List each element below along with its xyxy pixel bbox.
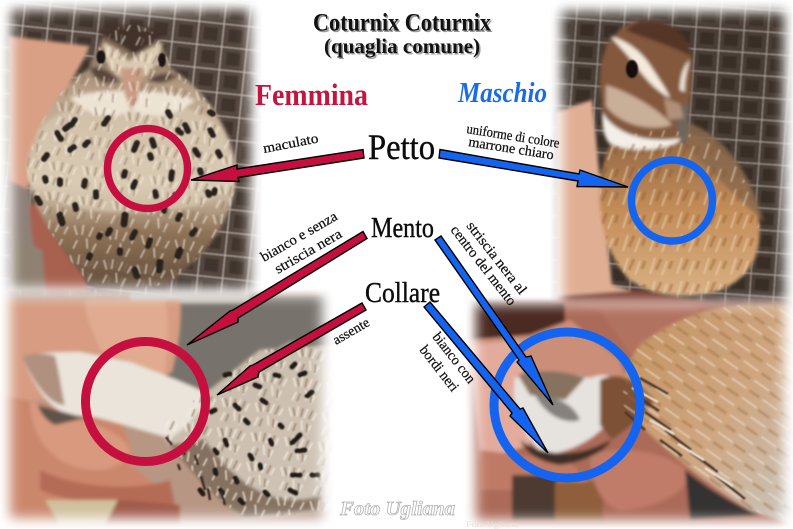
note: striscia nera al centro del mento: striscia nera al bbox=[463, 219, 530, 298]
heading: Maschio: Maschio bbox=[457, 77, 547, 109]
arrow: Collare to female collar bbox=[217, 303, 366, 395]
note: bianco con bordi neri: bordi neri bbox=[416, 343, 462, 395]
photo: female quail front bbox=[0, 0, 262, 300]
note: bianco e senza striscia nera: striscia nera bbox=[272, 226, 345, 277]
photo: male quail chin held in hand bbox=[465, 298, 793, 528]
note: bianco e senza striscia nera: bianco e senza bbox=[258, 208, 341, 265]
note: uniforme di colore marrone chiaro: marrone chiaro bbox=[467, 135, 555, 163]
arrow: Petto to male breast bbox=[439, 150, 628, 187]
watermark: small credit: Foto Ugliana bbox=[466, 520, 519, 529]
circle: female breast bbox=[108, 128, 188, 208]
note: uniforme di colore marrone chiaro bbox=[465, 122, 561, 163]
title: (quaglia comune) bbox=[324, 34, 480, 58]
circle: female chin bbox=[86, 342, 206, 462]
photo: female quail chin held in hand bbox=[0, 290, 335, 529]
note: assente: assente bbox=[330, 315, 373, 348]
note: uniforme di colore marrone chiaro: uniforme di colore bbox=[465, 122, 561, 152]
arrow: Mento to female chin bbox=[187, 232, 367, 345]
circle: male breast bbox=[632, 160, 712, 241]
title bbox=[313, 10, 493, 60]
title: Coturnix Coturnix bbox=[313, 10, 491, 36]
label: Collare: Collare bbox=[365, 277, 440, 309]
label: Mento: Mento bbox=[371, 212, 434, 244]
circle: male chin bbox=[494, 332, 640, 478]
note: striscia nera al centro del mento: centro del mento bbox=[447, 223, 519, 309]
note: bianco con bordi neri: bianco con bbox=[429, 330, 479, 387]
label: Petto: Petto bbox=[368, 127, 435, 167]
heading: Femmina: Femmina bbox=[255, 77, 368, 112]
watermark: Foto Ugliana: Foto Ugliana bbox=[339, 498, 455, 520]
arrow: Petto to female breast bbox=[191, 150, 364, 182]
photo: male quail front bbox=[550, 0, 793, 315]
arrow: Mento to male chin bbox=[435, 236, 553, 405]
note: maculato: maculato bbox=[262, 132, 320, 157]
title: (quaglia comune) bbox=[326, 36, 482, 60]
title: Coturnix Coturnix bbox=[314, 11, 493, 38]
arrow: Collare to male collar bbox=[424, 302, 548, 453]
